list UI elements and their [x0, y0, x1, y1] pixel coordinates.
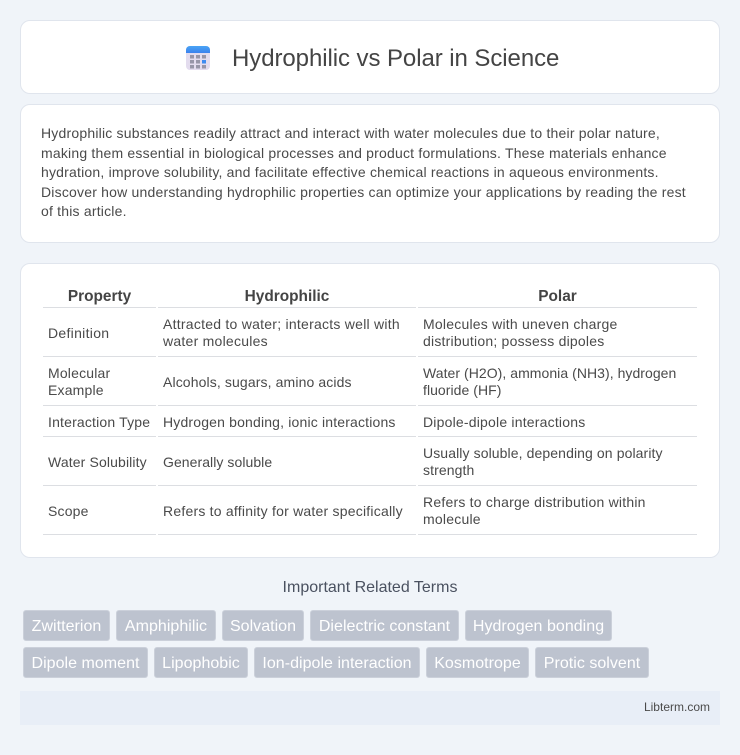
Molecular Example polar: Water (H2O), ammonia (NH3), hydrogen — [423, 365, 676, 381]
tag: Lipophobic: Lipophobic — [162, 655, 240, 672]
tag: Solvation — [222, 610, 304, 641]
title: Hydrophilic vs Polar in Science — [232, 45, 559, 72]
intro text: Discover how understanding hydrophilic properties can optimize your applications by reading the rest — [41, 184, 686, 200]
Interaction Type polar: Dipole-dipole interactions — [423, 414, 585, 430]
intro text: of this article. — [41, 203, 127, 219]
row: Molecular Example: Molecular — [48, 365, 110, 381]
tag: Ion-dipole interaction: Ion-dipole interaction — [262, 655, 412, 672]
footer text: Libterm.com — [644, 700, 710, 714]
header card — [20, 20, 720, 94]
footer bar — [20, 691, 720, 725]
Water Solubility polar: strength — [423, 462, 474, 478]
tag: Dielectric constant — [310, 610, 459, 641]
tag: Zwitterion — [23, 610, 110, 641]
tag: Kosmotrope: Kosmotrope — [434, 655, 521, 672]
Scope polar: molecule — [423, 511, 481, 527]
Molecular Example hydrophilic: Alcohols, sugars, amino acids — [163, 374, 352, 390]
row: Molecular Example — [48, 365, 110, 398]
tag: Dipole moment — [23, 647, 148, 678]
related terms heading: Important Related Terms — [283, 579, 457, 596]
panel: introduction — [20, 104, 720, 243]
tag: Ion-dipole interaction — [254, 647, 420, 678]
row: Scope: Scope — [48, 503, 89, 519]
tag: Protic solvent: Protic solvent — [544, 655, 640, 672]
Definition polar — [423, 316, 618, 349]
Water Solubility polar: Usually soluble, depending on polarity — [423, 445, 663, 461]
Molecular Example polar: fluoride (HF) — [423, 382, 501, 398]
table header: Property: Property — [68, 288, 131, 305]
tag: Dipole moment: Dipole moment — [32, 655, 140, 672]
tag: Lipophobic — [154, 647, 248, 678]
Definition hydrophilic: Attracted to water; interacts well with — [163, 316, 400, 332]
row: Interaction Type: Interaction Type — [48, 414, 150, 430]
Scope hydrophilic: Refers to affinity for water specifically — [163, 503, 403, 519]
tag: Hydrogen bonding: Hydrogen bonding — [473, 618, 604, 635]
row: Water Solubility: Water Solubility — [48, 454, 147, 470]
Water Solubility polar — [423, 445, 663, 478]
Definition hydrophilic: water molecules — [163, 333, 268, 349]
intro text: Hydrophilic substances readily attract and interact with water molecules due to their polar nature, — [41, 125, 660, 141]
Scope polar — [423, 494, 646, 527]
tag: Amphiphilic — [116, 610, 216, 641]
Definition polar: Molecules with uneven charge — [423, 316, 618, 332]
table header: Hydrophilic: Hydrophilic — [245, 288, 329, 305]
row: Molecular Example: Example — [48, 382, 104, 398]
Interaction Type hydrophilic: Hydrogen bonding, ionic interactions — [163, 414, 396, 430]
intro text — [41, 125, 686, 219]
panel: comparison table — [20, 263, 720, 558]
intro text: hydration, improve solubility, and facilitate effective chemical reactions in aqueous environments. — [41, 164, 659, 180]
icon: calendar grid — [186, 46, 210, 70]
tag: Solvation: Solvation — [230, 618, 296, 635]
Definition polar: distribution; possess dipoles — [423, 333, 604, 349]
Molecular Example polar — [423, 365, 676, 398]
row: Definition: Definition — [48, 325, 109, 341]
tag: Kosmotrope — [426, 647, 529, 678]
Scope polar: Refers to charge distribution within — [423, 494, 646, 510]
tag: Zwitterion: Zwitterion — [32, 618, 101, 635]
tag: Amphiphilic: Amphiphilic — [125, 618, 207, 635]
tag: Dielectric constant: Dielectric constant — [319, 618, 450, 635]
table header: Polar: Polar — [538, 288, 577, 305]
tag: Hydrogen bonding — [465, 610, 612, 641]
tag: Protic solvent — [535, 647, 649, 678]
intro text: making them essential in biological processes and product formulations. These materials enhance — [41, 145, 667, 161]
Definition hydrophilic — [163, 316, 400, 349]
Water Solubility hydrophilic: Generally soluble — [163, 454, 272, 470]
